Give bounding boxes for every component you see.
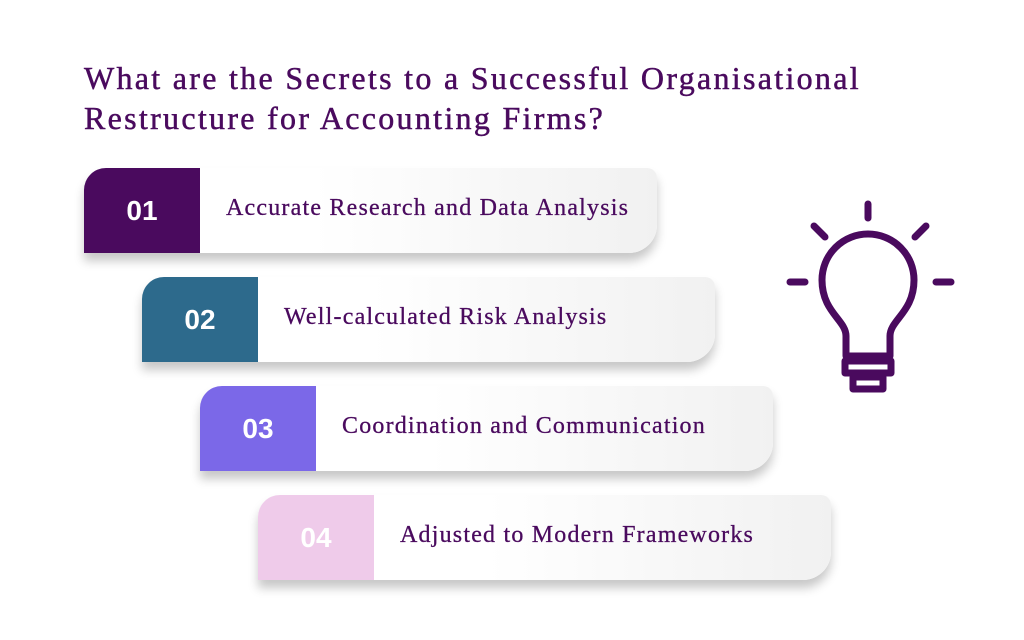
card 02: Well-calculated Risk Analysis xyxy=(284,304,607,330)
card 01: Accurate Research and Data Analysis xyxy=(226,195,629,221)
title: Restructure for Accounting Firms? xyxy=(84,100,605,136)
card 03 xyxy=(200,386,773,471)
card 01 xyxy=(84,168,657,253)
card 01: 01 xyxy=(126,194,158,226)
card 04 xyxy=(258,495,831,580)
card 02 xyxy=(142,277,715,362)
card 02: 02 xyxy=(184,304,216,334)
card 03: Coordination and Communication xyxy=(342,413,706,439)
card 04: Adjusted to Modern Frameworks xyxy=(400,522,754,548)
title: What are the Secrets to a Successful Organisational xyxy=(84,60,861,96)
card 03: 03 xyxy=(242,412,274,444)
title xyxy=(84,60,861,136)
card 04: 04 xyxy=(300,522,332,552)
